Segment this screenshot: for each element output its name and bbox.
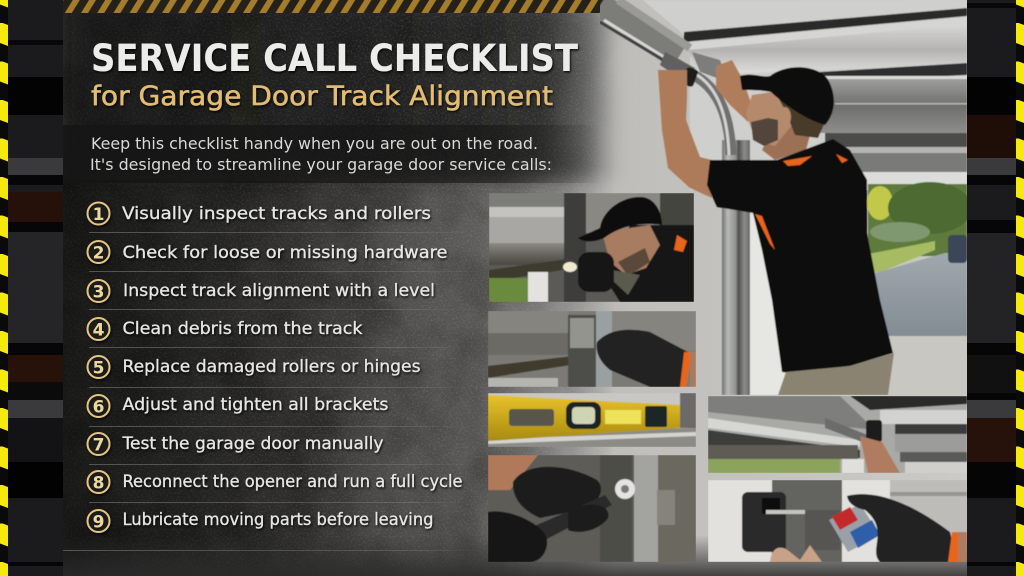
item 2: 2 xyxy=(93,244,104,264)
vertical track xyxy=(722,140,750,395)
technician face xyxy=(746,90,792,146)
black polo shirt xyxy=(707,139,893,373)
photo: overhead track and hand xyxy=(708,396,967,473)
white wall right of track xyxy=(749,212,786,395)
photo: technician inspecting track with flashlight xyxy=(489,193,694,302)
roller hardware xyxy=(660,52,728,88)
intro text: It's designed to streamline your garage door service calls: xyxy=(90,155,552,174)
item 9: 9 xyxy=(93,512,104,532)
item 2: Check for loose or missing hardware xyxy=(122,243,448,263)
photo: gloved hand tightening bracket xyxy=(488,311,696,387)
photo: hands adjusting roller with tool xyxy=(488,455,696,562)
item 3: Inspect track alignment with a level xyxy=(123,281,435,301)
top hazard stripe bar xyxy=(63,0,607,13)
raised arm right and hand xyxy=(716,60,752,122)
khaki trousers xyxy=(778,353,894,395)
subtitle: for Garage Door Track Alignment xyxy=(91,81,553,112)
right yellow and black hazard stripe xyxy=(1016,0,1024,576)
curved track and rail xyxy=(600,0,731,155)
item 7: 7 xyxy=(93,436,104,456)
garage door panels xyxy=(643,0,967,190)
photo: lubricating bracket with spray can xyxy=(708,480,967,562)
item 4: Clean debris from the track xyxy=(122,319,363,339)
item 8: 8 xyxy=(93,474,104,494)
ear xyxy=(783,106,792,122)
right side bar with bands xyxy=(967,0,1016,576)
item 7: Test the garage door manually xyxy=(121,434,384,454)
technician neck xyxy=(762,125,810,161)
item 6: Adjust and tighten all brackets xyxy=(122,395,389,415)
orange shirt accents xyxy=(755,154,848,250)
main photo: technician adjusting garage door track xyxy=(600,0,972,395)
intro text: Keep this checklist handy when you are out on the road. xyxy=(91,134,538,153)
photo: yellow spirit level xyxy=(488,393,696,447)
item 5: Replace damaged rollers or hinges xyxy=(122,357,421,377)
item 4: 4 xyxy=(93,320,105,340)
item 1: Visually inspect tracks and rollers xyxy=(122,204,431,224)
title: SERVICE CALL CHECKLIST xyxy=(91,37,579,80)
technician beard xyxy=(751,118,778,146)
driveway and greenery seen through the doorway xyxy=(867,182,972,395)
item 1: 1 xyxy=(93,205,104,225)
raised arm left xyxy=(658,70,712,198)
item 3: 3 xyxy=(93,282,104,302)
item 8: Reconnect the opener and run a full cycle xyxy=(122,472,462,492)
left side bar with bands xyxy=(8,0,63,576)
checklist xyxy=(63,202,483,551)
intro text xyxy=(90,134,552,174)
item 9: Lubricate moving parts before leaving xyxy=(122,510,434,530)
item 5: 5 xyxy=(93,358,104,378)
technician hair xyxy=(778,97,825,138)
cap xyxy=(740,67,834,125)
left yellow and black hazard stripe xyxy=(0,0,8,576)
item 6: 6 xyxy=(93,398,104,418)
